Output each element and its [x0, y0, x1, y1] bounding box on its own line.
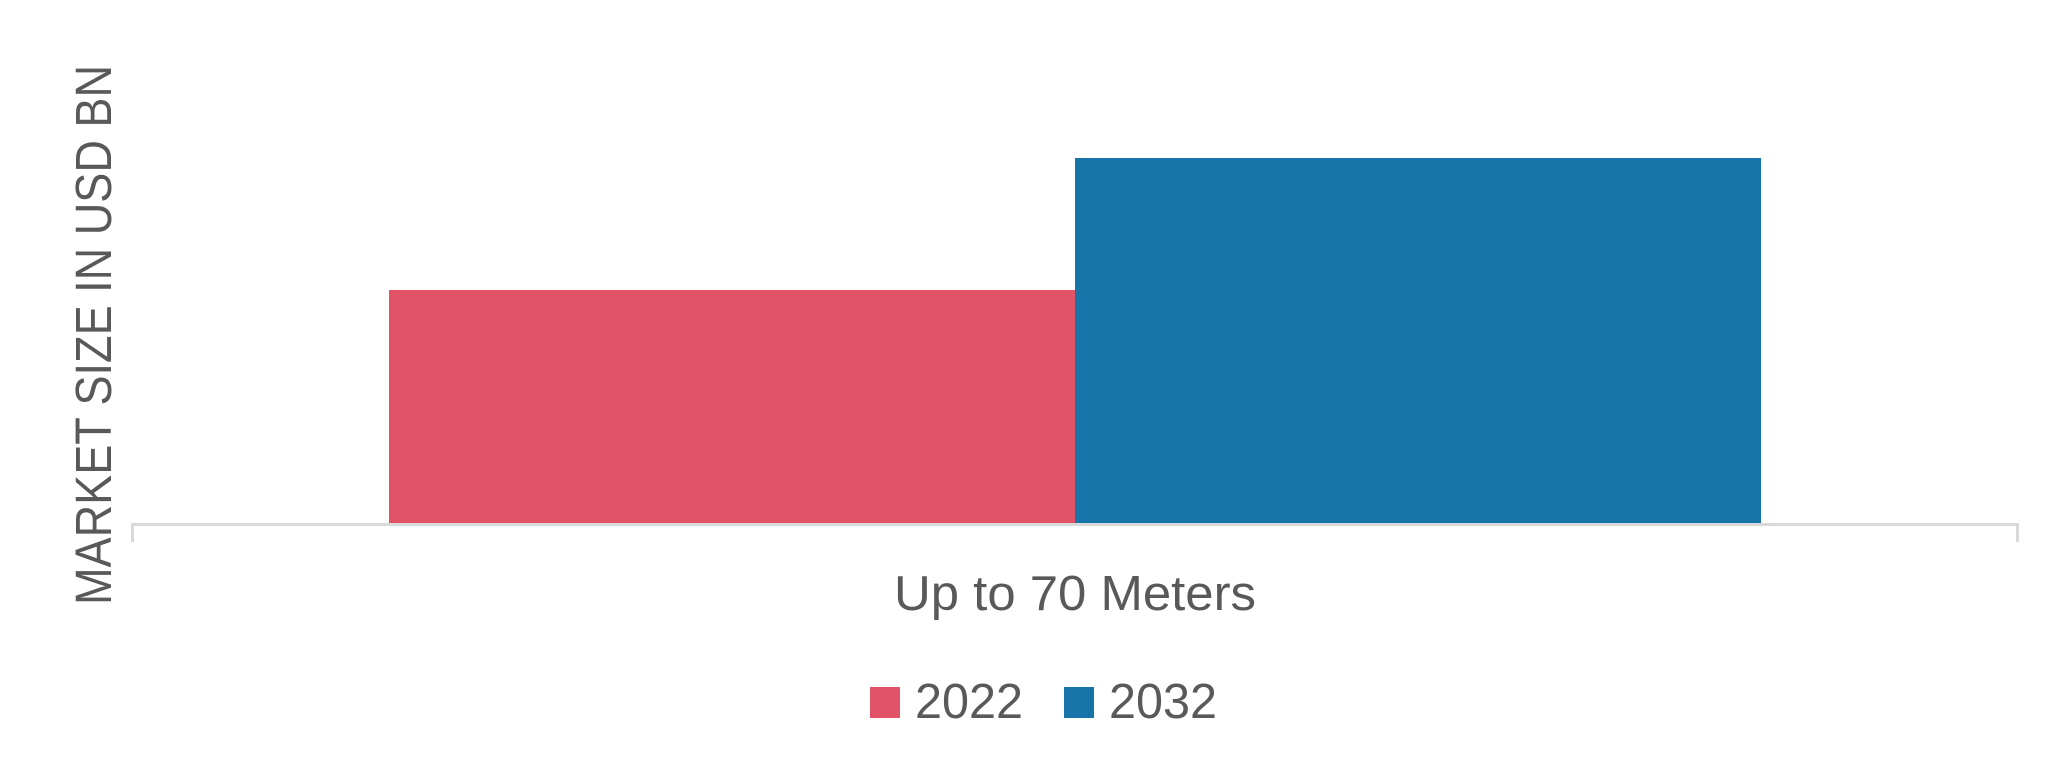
legend [870, 675, 1217, 729]
legend label: 2022: 2022 [915, 675, 1023, 729]
legend swatch: 2022 [870, 687, 900, 718]
x axis line with ticks [132, 524, 2018, 542]
bar: 2032 [1075, 158, 1761, 524]
x axis category label: Up to 70 Meters [894, 567, 1256, 621]
legend label: 2032: 2032 [1109, 675, 1217, 729]
bar: 2022 [389, 290, 1075, 524]
y axis title: MARKET SIZE IN USD BN [65, 65, 122, 605]
legend swatch: 2032 [1064, 687, 1094, 718]
